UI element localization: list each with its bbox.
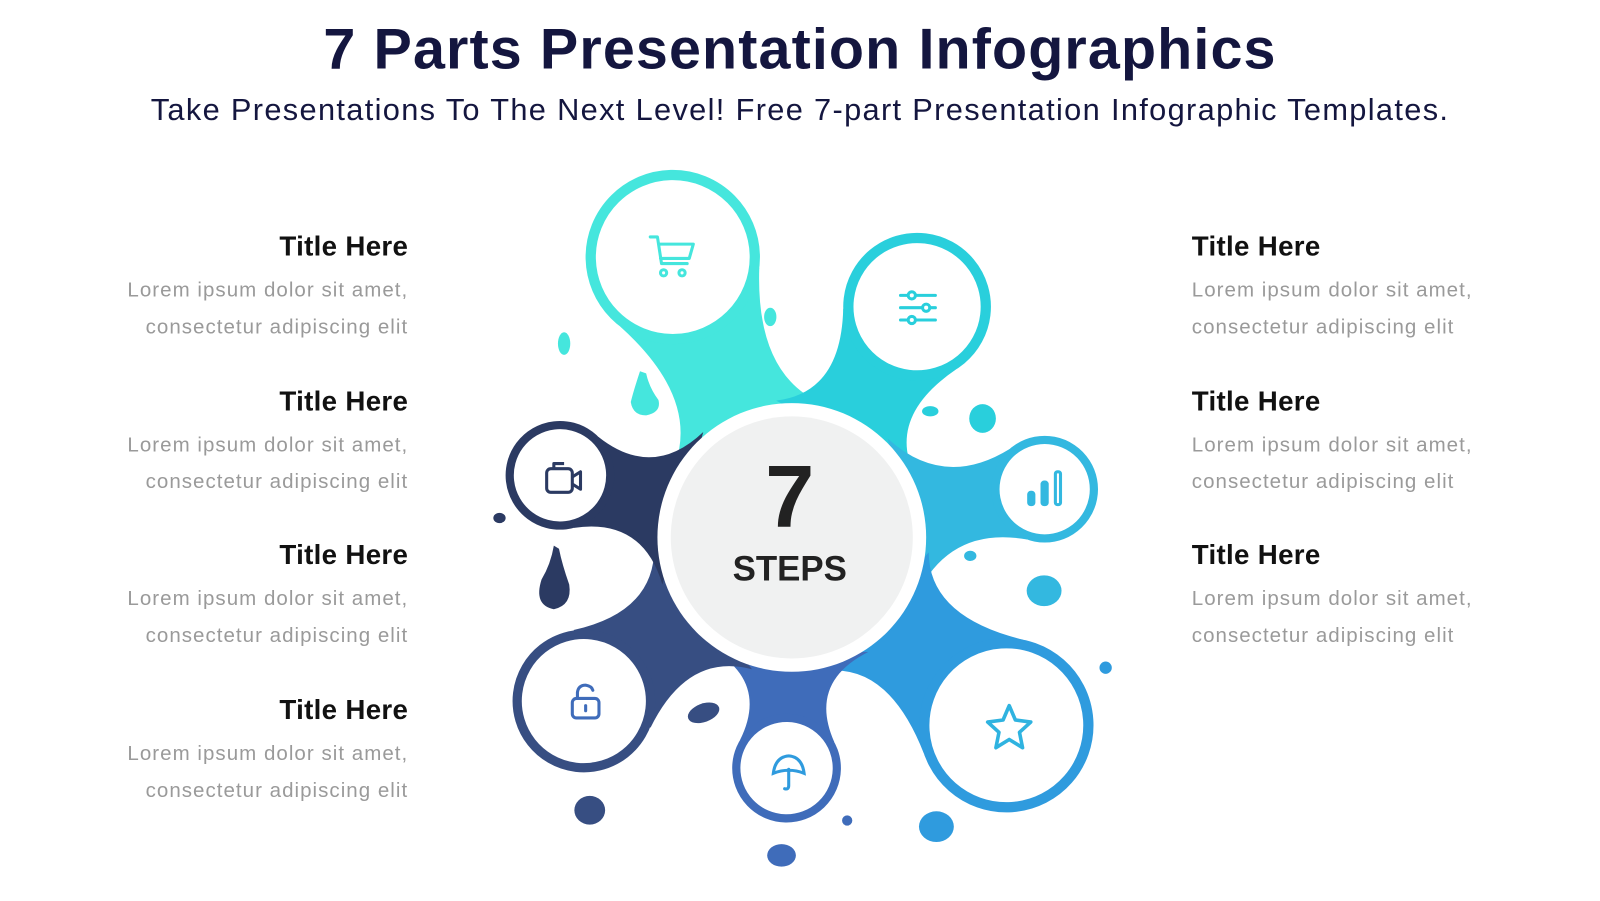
subtitle: Take Presentations To The Next Level! Free 7-part Presentation Infographic Templates. xyxy=(151,93,1449,127)
left text block 3: consectetur adipiscing elit xyxy=(146,625,408,647)
left text block 4: Title Here xyxy=(279,694,408,725)
right text block 1: consectetur adipiscing elit xyxy=(1192,316,1454,338)
left text block 3: Title Here xyxy=(279,539,408,570)
left text block 2 xyxy=(127,386,408,493)
petal: bars xyxy=(888,402,1108,594)
right text block 3: consectetur adipiscing elit xyxy=(1192,625,1454,647)
icon: bars xyxy=(1029,472,1061,505)
left text block 1: Lorem ipsum dolor sit amet, xyxy=(127,279,408,302)
right text block 1: Lorem ipsum dolor sit amet, xyxy=(1192,279,1473,302)
petal: cart xyxy=(565,149,823,466)
icon: video camera xyxy=(547,464,581,492)
left text block 2: Lorem ipsum dolor sit amet, xyxy=(127,434,408,456)
icon: lock xyxy=(572,685,599,718)
right text block 3: Lorem ipsum dolor sit amet, xyxy=(1192,588,1473,610)
icon: sliders xyxy=(901,292,935,324)
right text block 2: Lorem ipsum dolor sit amet, xyxy=(1192,434,1473,456)
left text block 1: consectetur adipiscing elit xyxy=(146,316,408,338)
center circle: STEPS xyxy=(733,550,847,589)
petal: star xyxy=(823,550,1122,841)
icon: star xyxy=(988,706,1031,748)
right text block 3 xyxy=(1192,539,1473,647)
petal: sliders xyxy=(776,209,1019,476)
left text block 2: consectetur adipiscing elit xyxy=(146,471,408,493)
center circle: 7 xyxy=(765,447,814,546)
icon: cart xyxy=(650,237,693,276)
title: 7 Parts Presentation Infographics xyxy=(323,16,1277,81)
left text block 2: Title Here xyxy=(279,386,408,416)
left text block 4 xyxy=(127,694,408,802)
right text block 2 xyxy=(1192,386,1473,493)
left text block 4: Lorem ipsum dolor sit amet, xyxy=(127,743,408,765)
left text block 3 xyxy=(127,539,408,647)
right text block 2: consectetur adipiscing elit xyxy=(1192,471,1454,493)
blobs xyxy=(493,308,1112,867)
petal: video xyxy=(491,386,703,585)
right text block 2: Title Here xyxy=(1192,386,1321,416)
petal: lock xyxy=(483,545,752,804)
left text block 1: Title Here xyxy=(279,231,408,262)
right text block 3: Title Here xyxy=(1192,539,1321,570)
petal: umbrella xyxy=(706,648,868,820)
icon: umbrella xyxy=(773,756,804,789)
left text block 4: consectetur adipiscing elit xyxy=(146,779,408,802)
left text block 3: Lorem ipsum dolor sit amet, xyxy=(127,588,408,610)
center circle xyxy=(657,403,926,672)
right text block 1: Title Here xyxy=(1192,231,1321,262)
right text block 1 xyxy=(1192,231,1473,338)
left text block 1 xyxy=(127,231,408,338)
